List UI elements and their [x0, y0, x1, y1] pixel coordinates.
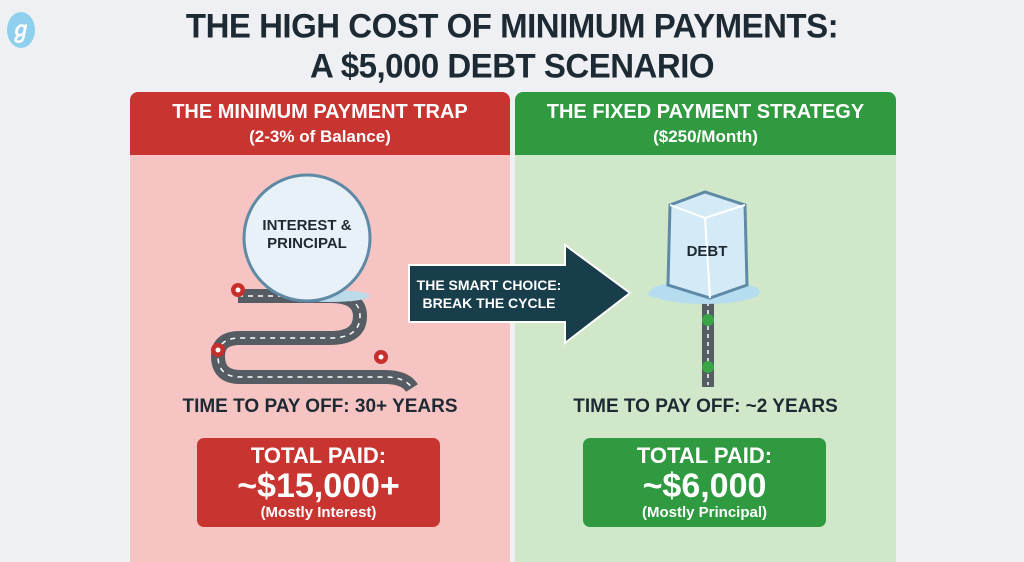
logo icon: ℊ: [10, 17, 32, 42]
icon: straight road: [702, 300, 714, 387]
icon: snowball: INTEREST &: [262, 217, 352, 234]
icon: ice cube: DEBT: [687, 243, 727, 260]
header: red: THE MINIMUM PAYMENT TRAP: [172, 101, 468, 123]
arrow: the smart choice: [409, 245, 630, 343]
icon: winding road: [211, 283, 412, 388]
header: red: (2-3% of Balance): [249, 127, 391, 146]
title: [186, 6, 838, 85]
title: A $5,000 DEBT SCENARIO: [310, 46, 714, 85]
text: time to pay off red: TIME TO PAY OFF: 30+ YEARS: [182, 396, 458, 417]
callout: total paid red: TOTAL PAID:: [251, 443, 386, 468]
callout: total paid red: (Mostly Interest): [261, 504, 376, 521]
header: green: THE FIXED PAYMENT STRATEGY: [547, 101, 864, 123]
header: green: [515, 92, 896, 155]
arrow: the smart choice: THE SMART CHOICE:: [417, 277, 561, 293]
icon: snowball: [244, 175, 370, 302]
callout: total paid red: ~$15,000+: [237, 467, 400, 505]
panel: fixed payment strategy: [515, 92, 896, 562]
icon: ice cube: [648, 192, 760, 304]
callout: total paid green: [583, 438, 826, 527]
title: THE HIGH COST OF MINIMUM PAYMENTS:: [186, 6, 838, 45]
panel: minimum payment trap: [130, 92, 510, 562]
callout: total paid green: TOTAL PAID:: [637, 443, 772, 468]
header: green: ($250/Month): [653, 127, 758, 146]
header: red: [130, 92, 510, 155]
callout: total paid green: (Mostly Principal): [642, 504, 767, 521]
logo icon: [7, 12, 35, 48]
callout: total paid green: ~$6,000: [643, 467, 766, 505]
callout: total paid red: [197, 438, 440, 527]
icon: snowball: PRINCIPAL: [267, 235, 347, 252]
text: time to pay off green: TIME TO PAY OFF: ~2 YEARS: [573, 396, 838, 417]
arrow: the smart choice: BREAK THE CYCLE: [422, 295, 556, 311]
